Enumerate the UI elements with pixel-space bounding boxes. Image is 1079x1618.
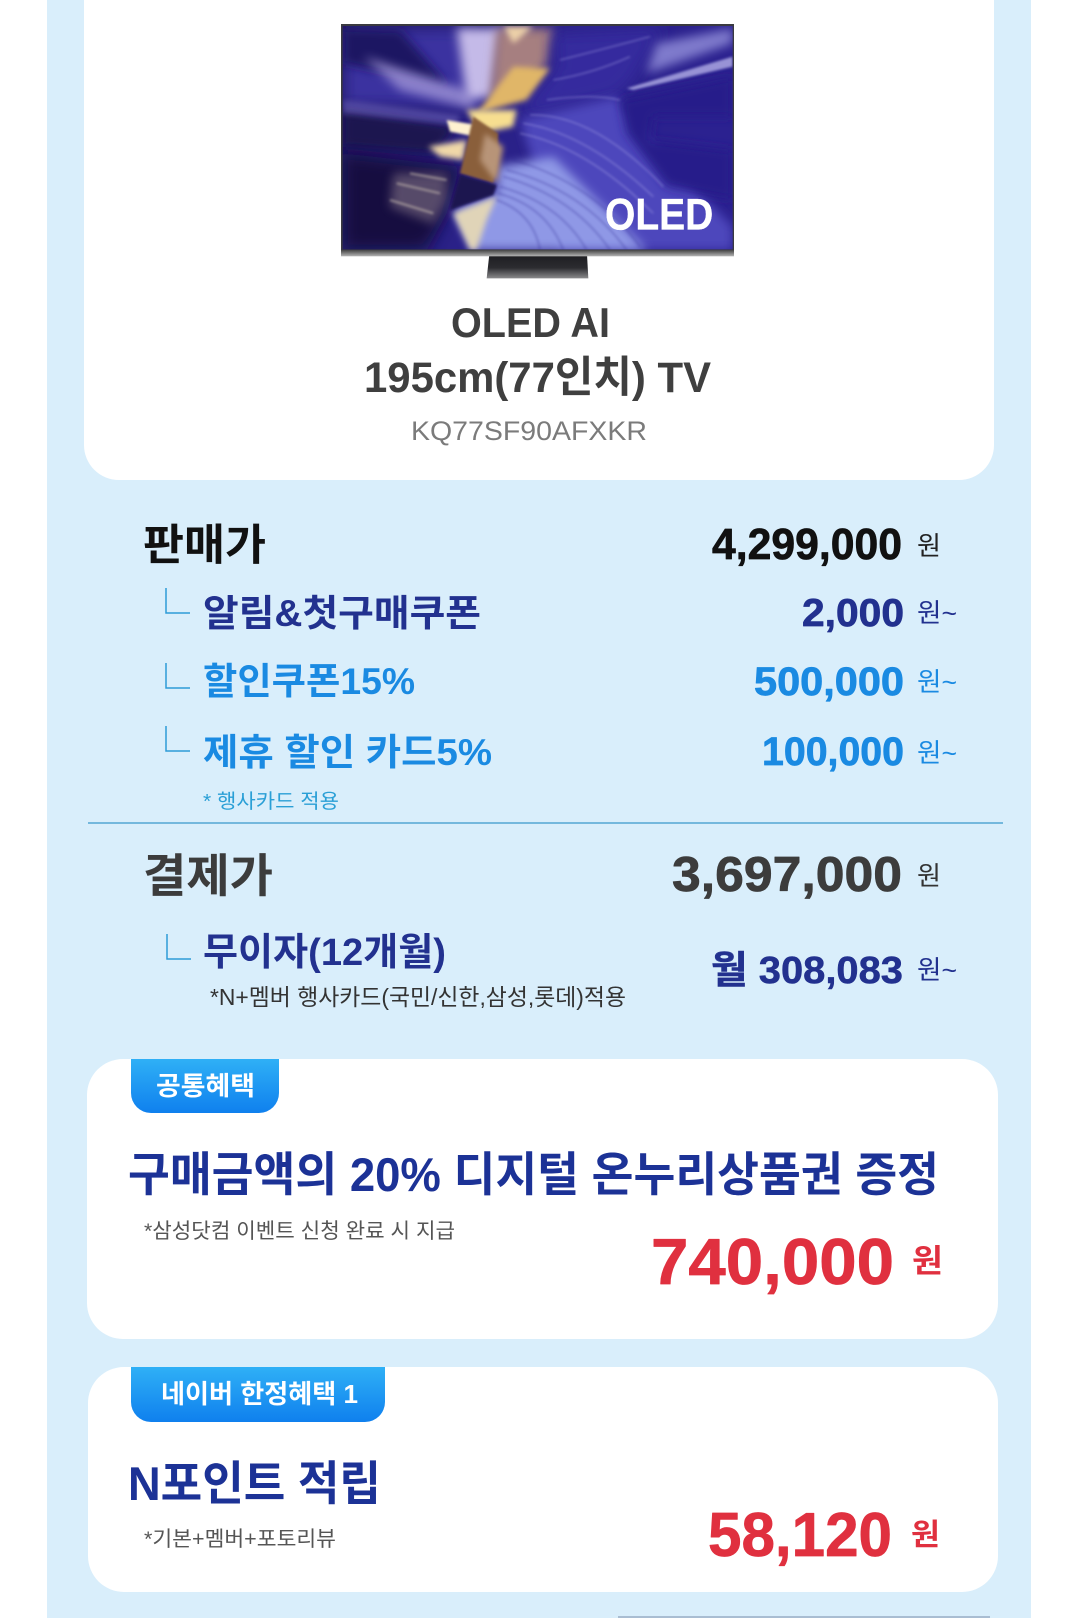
benefit note: *기본+멤버+포토리뷰 bbox=[144, 1528, 336, 1551]
panel: product card bbox=[84, 0, 994, 480]
partner card amount: 100,000 bbox=[762, 730, 904, 774]
benefit heading: 구매금액의 20% 디지털 온누리상품권 증정 bbox=[128, 1148, 939, 1201]
won unit: 원~ bbox=[917, 667, 957, 697]
benefit note: *삼성닷컴 이벤트 신청 완료 시 지급 bbox=[144, 1220, 455, 1243]
interest free note: *N+멤버 행사카드(국민/신한,삼성,롯데)적용 bbox=[210, 984, 626, 1010]
won unit: 원~ bbox=[917, 738, 957, 768]
icon: branch mark bbox=[166, 588, 190, 613]
model number: KQ77SF90AFXKR bbox=[411, 416, 647, 446]
footnote strip cut off at page edge bbox=[618, 1616, 990, 1618]
badge: Naver limited benefit 1: 네이버 한정혜택 1 bbox=[161, 1379, 358, 1409]
monthly payment: 월 308,083 bbox=[711, 950, 903, 992]
discount coupon label: 할인쿠폰15% bbox=[203, 661, 415, 702]
badge: Naver limited benefit 1 bbox=[131, 1367, 385, 1422]
benefit heading: N포인트 적립 bbox=[128, 1457, 381, 1510]
won unit: 원 bbox=[911, 1519, 940, 1552]
discount coupon amount: 500,000 bbox=[754, 660, 904, 704]
badge: common benefit: 공통혜택 bbox=[156, 1071, 255, 1101]
partner card note: * 행사카드 적용 bbox=[203, 790, 339, 813]
icon: branch mark bbox=[166, 726, 190, 751]
won unit: 원~ bbox=[917, 598, 957, 628]
sale price label: 판매가 bbox=[143, 522, 266, 570]
badge: common benefit bbox=[131, 1059, 279, 1113]
panel: Naver limited benefit bbox=[88, 1367, 998, 1592]
coupon amount: 2,000 bbox=[802, 592, 904, 635]
icon: branch mark bbox=[167, 934, 191, 959]
interest free label: 무이자(12개월) bbox=[203, 932, 446, 974]
won unit: 원 bbox=[912, 1243, 943, 1279]
sale price: 4,299,000 bbox=[712, 520, 902, 569]
won unit: 원 bbox=[917, 861, 941, 891]
coupon label: 알림&첫구매쿠폰 bbox=[203, 593, 481, 634]
benefit amount: 740,000 bbox=[651, 1225, 894, 1298]
panel: price breakdown bbox=[88, 520, 1003, 1010]
won unit: 원 bbox=[917, 531, 941, 561]
panel: common benefit bbox=[87, 1059, 998, 1339]
icon label: OLED wordmark: OLED bbox=[605, 190, 713, 239]
final price label: 결제가 bbox=[143, 850, 273, 902]
partner card label: 제휴 할인 카드5% bbox=[203, 732, 492, 773]
icon: branch mark bbox=[166, 663, 190, 688]
final price: 3,697,000 bbox=[672, 848, 902, 902]
product name line 2: 195cm(77인치) TV bbox=[364, 354, 711, 402]
benefit amount: 58,120 bbox=[708, 1501, 892, 1570]
icon: OLED television bbox=[341, 24, 734, 278]
product name line 1: OLED AI bbox=[451, 299, 610, 346]
won unit: 원~ bbox=[917, 955, 957, 985]
